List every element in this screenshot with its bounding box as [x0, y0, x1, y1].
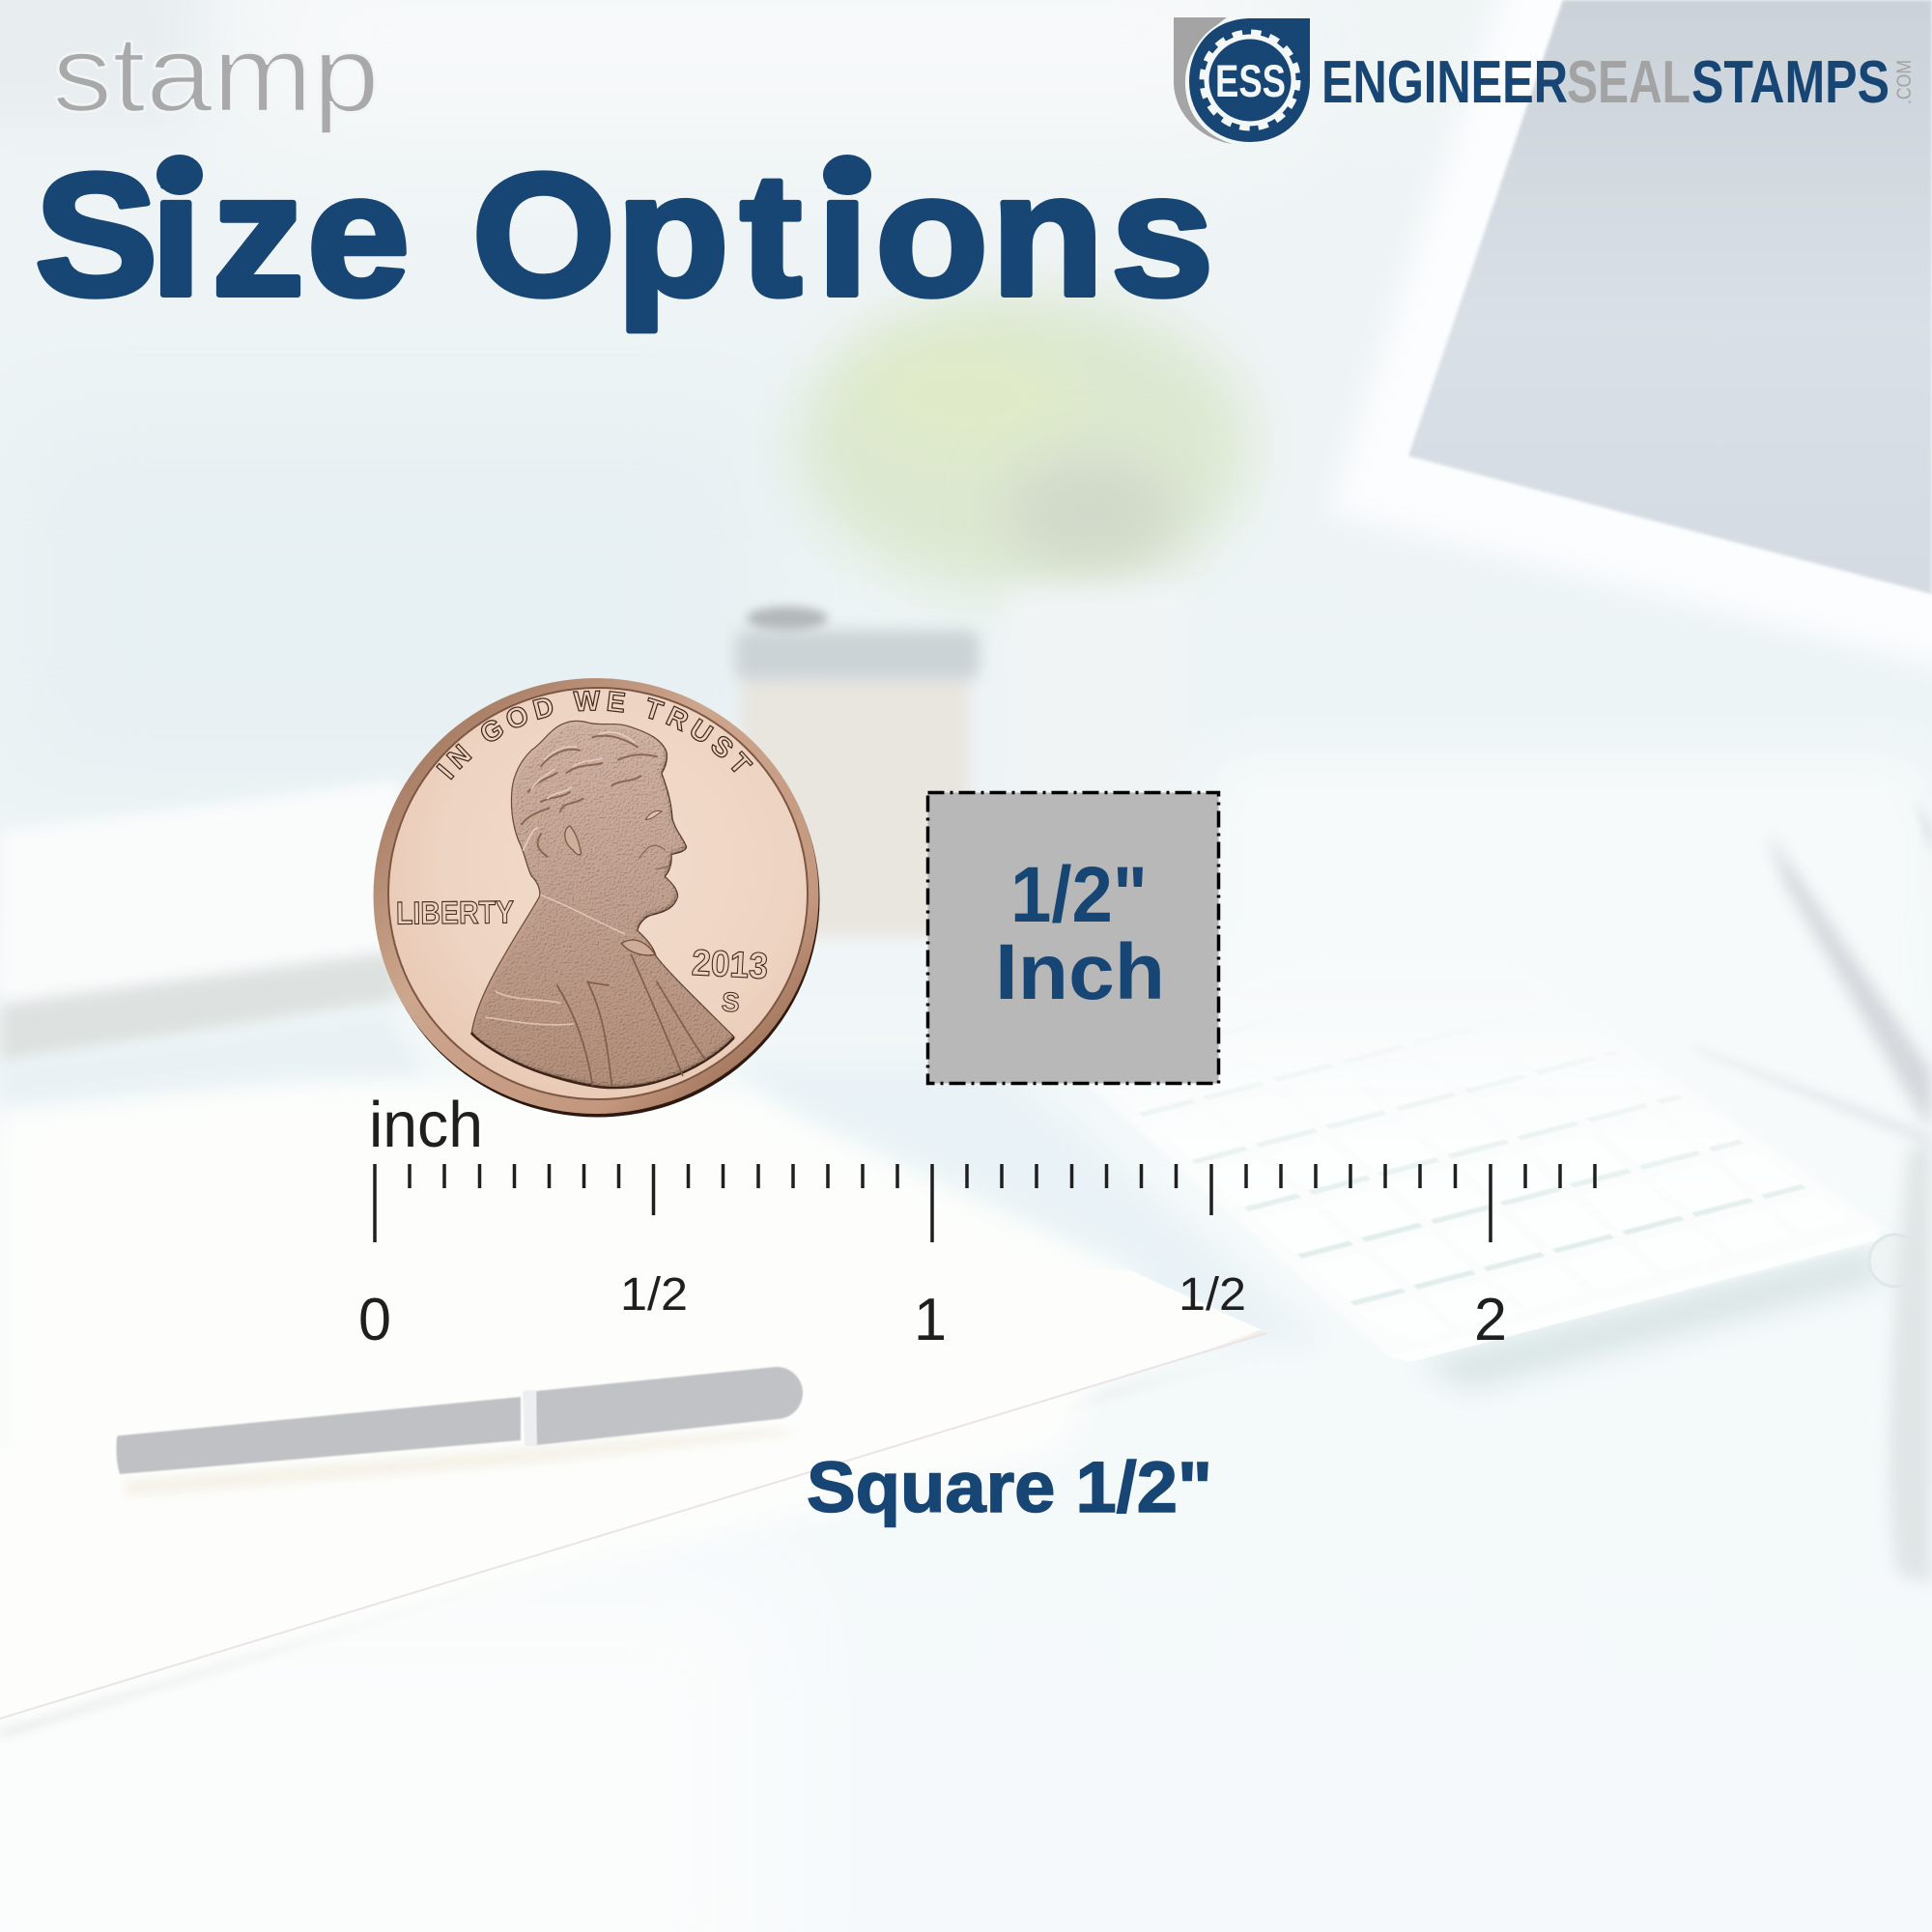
- icon: penny coin: [373, 678, 819, 1117]
- logo: Engineer Seal Stamps: SEAL: [1567, 49, 1690, 116]
- icon: ESS gear shield: [1174, 17, 1311, 144]
- ruler numbers: [358, 1269, 1507, 1353]
- keyboard: [1109, 1086, 1902, 1393]
- logo: Engineer Seal Stamps: .COM: [1893, 60, 1916, 104]
- caption: Square 1/2": Square 1/2": [807, 1447, 1212, 1527]
- logo: Engineer Seal Stamps: STAMPS: [1691, 49, 1889, 116]
- paper sheet: [0, 1084, 1275, 1739]
- stamp size square: 1/2 inch: [927, 792, 1219, 1084]
- coin text: S mint mark: S: [721, 986, 741, 1018]
- stamp size square: 1/2 inch: 1/2": [1010, 851, 1148, 939]
- logo: Engineer Seal Stamps: ENGINEER: [1321, 49, 1568, 116]
- coin inscription: IN GOD WE TRUST: [436, 690, 753, 781]
- stamp size square: 1/2 inch: Inch: [995, 928, 1165, 1016]
- ruler: [358, 1089, 1595, 1353]
- coin text: 2013: 2013: [691, 943, 769, 987]
- ruler numbers: 1/2: [1179, 1269, 1246, 1321]
- ruler unit label: inch: [369, 1089, 483, 1161]
- heading: stamp: stamp: [52, 14, 380, 134]
- ruler ticks: [375, 1164, 1595, 1242]
- ruler numbers: 1/2: [620, 1269, 688, 1321]
- pencils and mug: [1687, 797, 1932, 1584]
- coin portrait: [471, 721, 734, 1088]
- pen: [116, 1367, 803, 1497]
- title: Size Options: Size Options: [35, 138, 1213, 332]
- ruler numbers: 0: [358, 1287, 391, 1353]
- coin text: LIBERTY: LIBERTY: [396, 894, 514, 931]
- ruler numbers: 2: [1474, 1287, 1507, 1353]
- ruler numbers: 1: [914, 1287, 947, 1353]
- icon: ESS gear shield: ESS: [1215, 55, 1286, 106]
- logo: Engineer Seal Stamps: [1174, 17, 1916, 144]
